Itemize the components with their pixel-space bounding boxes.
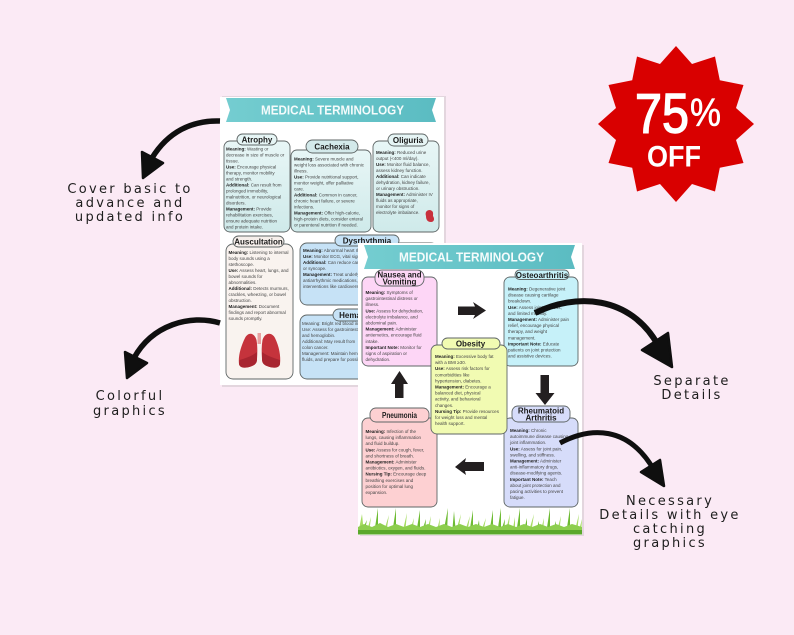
card: Obesity: comorbidities like [435,372,470,377]
card: Oliguria: dehydration, kidney failure, [376,180,430,185]
caption: colorful graphics: Colorful [96,389,164,404]
caption: necessary details: Details with eye [599,508,741,523]
icon: lungs [239,333,280,368]
card: Dysrhythmia: antiarrhythmic medications, [303,278,358,283]
card: Osteoarthritis: management. [508,335,536,340]
card: Cachexia: care. [294,187,304,192]
discount badge: 75 [635,82,689,144]
card: Auscultation [226,236,293,379]
card: Obesity: for weight loss and mental [435,415,487,420]
caption: colorful graphics [93,389,167,419]
card: Osteoarthritis: Important Note: Educate [508,341,559,346]
card: Obesity: Use: Assess risk factors for [435,366,490,371]
card: Cachexia: Use: Provide nutritional support, [294,175,359,180]
card: Oliguria: fluids as appropriate, [376,198,418,203]
card: Atrophy: Management: Provide [226,206,272,211]
card: Oliguria: Additional: Can indicate [376,174,426,179]
card: Atrophy: Meaning: Wasting or [226,146,268,151]
back worksheet page [220,96,446,387]
card: Oliguria: output (<400 ml/day). [376,156,419,161]
curved arrow: top left [142,121,220,178]
card: Atrophy [224,134,290,232]
card: Hematochezia: Hematochezia [339,311,393,320]
caption: cover basic: advance and [75,196,185,211]
card: Pneumonia: expansion. [366,490,387,495]
card: Oliguria: Management: Administer IV [376,192,433,197]
caption: separate details: Separate [653,374,731,389]
card: Dysrhythmia: Meaning: Abnormal heart rhythm. [303,248,371,253]
card: Hematochezia: colon cancer. [302,345,329,350]
card: Obesity: Management: Encourage a [435,384,491,390]
card: Hematochezia: fluids, and prepare for possible surgery. [302,357,381,362]
card: Rheumatoid Arthritis: anti-inflammatory drugs, [510,465,558,470]
card: Auscultation: crackles, wheezing, or bowel [228,292,286,297]
card: Auscultation: obstruction. [228,298,252,303]
card: Auscultation: bowel sounds for [228,274,263,279]
caption: separate details: Details [661,388,723,403]
card: Cachexia: Cachexia [314,142,350,152]
card: Nausea and Vomiting: Meaning: Symptoms of [366,290,413,295]
card: Rheumatoid Arthritis: Arthritis [525,414,557,422]
card: Osteoarthritis: breakdown. [508,299,531,304]
card: Cachexia: Additional: Common in cancer, [294,193,358,198]
front worksheet page [358,243,584,536]
card: Pneumonia: breathing exercises and [366,478,414,483]
caption: separate details [653,374,731,403]
card: Auscultation: findings and report abnormal [228,310,286,315]
card: Obesity: balanced diet, physical [435,391,481,396]
card: Rheumatoid Arthritis: disease-modifying agents. [510,471,562,476]
card: Nausea and Vomiting: Nausea and [378,270,422,280]
card: Atrophy: disorders. [226,200,246,205]
discount badge [598,46,754,202]
card: Hematochezia: and hemoglobin. [302,333,335,338]
card: Atrophy: decrease in size of muscle or [226,152,285,157]
front page banner: MEDICAL TERMINOLOGY [399,250,544,264]
card: Pneumonia: position for optimal lung [366,484,414,489]
icon: kidney [426,210,434,222]
card: Obesity: Nursing Tip: Provide resources [435,409,499,414]
card: Rheumatoid Arthritis: fatigue. [510,495,525,500]
card: Obesity: Obesity [456,340,486,348]
card: Atrophy: ensure adequate nutrition [226,218,278,223]
curved arrow: necessary details [560,433,664,486]
card: Nausea and Vomiting: illness. [366,302,379,307]
card: Hematochezia: Meaning: Bright red blood in stool. [302,321,370,326]
card: Nausea and Vomiting: antiemetics, encourage fluid [366,333,422,338]
curved arrow: bottom left [125,320,220,378]
card: Dysrhythmia: or syncope. [303,266,326,271]
card: Auscultation: stethoscope. [228,262,254,267]
card: Auscultation: Management: Document [228,304,279,309]
card: Oliguria: electrolyte imbalance. [376,210,420,215]
discount badge: % [690,92,721,135]
card: Pneumonia: and fluid buildup. [366,441,400,446]
card: Nausea and Vomiting: Management: Administer [366,327,417,332]
card: Auscultation: Auscultation [234,238,283,246]
card: Nausea and Vomiting: abdominal pain. [366,320,397,326]
card: Atrophy: prolonged immobility, [226,188,268,193]
card: Atrophy: Atrophy [242,136,273,144]
card: Auscultation: Meaning: Listening to internal [228,250,289,255]
card: Hematochezia [300,309,438,379]
card: Rheumatoid Arthritis [504,406,578,507]
card: Oliguria [373,134,439,232]
card: Cachexia: Meaning: Severe muscle and [294,157,354,162]
card: Nausea and Vomiting: gastrointestinal distress or [366,296,418,301]
card: Osteoarthritis: and limited mobility. [508,311,547,316]
card: Cachexia: or parenteral nutrition if needed. [294,223,358,228]
card: Obesity: health support. [435,421,465,426]
card: Pneumonia: lungs, causing inflammation [366,435,422,440]
card: Obesity [431,338,507,434]
card: Rheumatoid Arthritis: Important Note: Teach [510,477,557,482]
card: Dysrhythmia: interventions like cardioversion. [303,284,366,289]
caption: necessary details: catching [633,522,707,537]
card: Nausea and Vomiting: Vomiting [382,278,417,286]
card: Pneumonia: Pneumonia [382,411,417,420]
card: Osteoarthritis: disease causing cartilage [508,293,559,298]
card: Auscultation: abnormalities. [228,280,257,285]
card: Dysrhythmia: Additional: Can reduce cardiac output [303,260,381,265]
card: Nausea and Vomiting: electrolyte imbalance, and [366,314,418,319]
card: Osteoarthritis: therapy, and weight [508,329,548,334]
card: Atrophy: malnutrition, or neurological [226,194,281,199]
card: Oliguria: Meaning: Reduced urine [376,150,426,155]
card: Osteoarthritis: relief, encourage physical [508,323,559,328]
back page banner [226,98,436,122]
caption: colorful graphics: graphics [93,404,167,419]
card: Osteoarthritis: Meaning: Degenerative joint [508,286,565,292]
curved arrow: separate details [535,301,672,367]
card: Oliguria: monitor for signs of [376,204,415,209]
grass strip [358,508,582,534]
card: Pneumonia: antibiotics, oxygen, and fluids. [366,466,426,471]
caption: cover basic [67,182,193,225]
card: Rheumatoid Arthritis: Use: Assess for joint pain, [510,446,562,451]
card: Rheumatoid Arthritis: pacing activities to prevent [510,489,564,494]
arrow: down [536,375,554,405]
card: Auscultation: body sounds using a [228,256,270,261]
card: Nausea and Vomiting: signs of aspiration or [366,351,408,356]
card: Oliguria: Oliguria [393,136,424,145]
card: Dysrhythmia: Management: Treat underlying cause, [303,272,380,277]
card: Osteoarthritis [504,270,578,366]
card: Cachexia: Management: Offer high-calorie, [294,211,360,216]
card: Obesity: activity, and behavioral [435,397,480,402]
card: Hematochezia: Management: Maintain hemodynamics, [302,351,381,356]
back page banner: MEDICAL TERMINOLOGY [261,102,404,118]
card: Cachexia: chronic heart failure, or severe [294,199,355,204]
discount badge: OFF [647,140,701,174]
card: Osteoarthritis: and assistive devices. [508,354,552,359]
card: Cachexia: high-protein diets, consider enteral [294,217,363,222]
front page banner [364,245,575,269]
card: Nausea and Vomiting: Important Note: Monitor for [366,345,422,350]
card: Osteoarthritis: Use: Assess joint stiffness, [508,305,562,310]
card: Pneumonia [362,408,437,507]
card: Rheumatoid Arthritis: joint inflammation. [509,440,546,445]
card: Pneumonia: Management: Administer [366,460,417,464]
card: Cachexia: weight loss associated with chronic [294,163,365,168]
card: Nausea and Vomiting: intake. [366,339,379,344]
card: Hematochezia: Additional: May result from [302,339,356,344]
card: Dysrhythmia: Use: Monitor ECG, vital signs. [303,254,364,259]
card: Pneumonia: Nursing Tip: Encourage deep [366,472,426,477]
card: Cachexia [291,140,371,232]
card: Nausea and Vomiting: Use: Assess for dehydration, [366,308,423,313]
card: Dysrhythmia [300,235,438,305]
card: Pneumonia: Meaning: Infection of the [366,429,416,434]
card: Osteoarthritis: patients on joint protection [508,348,561,352]
card: Rheumatoid Arthritis: Meaning: Chronic [510,428,547,433]
card: Osteoarthritis: Osteoarthritis [516,271,569,280]
card: Atrophy: Additional: Can result from [226,182,282,187]
card: Obesity: with a BMI ≥30. [435,360,466,365]
card: Atrophy: Use: Encourage physical [226,164,276,169]
card: Auscultation: Additional: Detects murmurs, [228,286,289,291]
card: Osteoarthritis: Management: Administer pain [508,317,569,322]
card: Atrophy: therapy, monitor mobility [226,170,275,175]
card: Rheumatoid Arthritis: swelling, and stiffness. [510,452,555,457]
arrow: up [391,371,408,398]
card: Rheumatoid Arthritis: Rheumatoid [518,406,564,416]
card: Rheumatoid Arthritis: about joint protection and [510,483,561,488]
card: Oliguria: Use: Monitor fluid balance, [376,162,430,167]
card: Atrophy: and strength. [226,176,252,181]
card: Atrophy: and protein intake. [226,224,263,229]
arrow: right [458,302,486,319]
card: Oliguria: assess kidney function. [376,168,423,173]
card: Cachexia: infections. [294,205,314,210]
card: Obesity: Meaning: Excessive body fat [435,354,494,359]
card: Auscultation: sounds promptly. [228,316,262,321]
caption: cover basic: Cover basic to [67,182,193,197]
card: Cachexia: monitor weight, offer palliative [294,181,354,186]
card: Obesity: hypertension, diabetes. [435,378,482,383]
card: Pneumonia: Use: Assess for cough, fever, [366,447,424,452]
card: Atrophy: rehabilitation exercises, [226,212,273,217]
card: Dysrhythmia: Dysrhythmia [343,236,392,246]
caption: necessary details [599,494,741,551]
card: Cachexia: illness. [294,169,308,174]
card: Oliguria: or urinary obstruction. [376,186,420,191]
card: Auscultation: Use: Assess heart, lungs, and [228,268,289,273]
card: Atrophy: tissue. [226,158,239,163]
card: Nausea and Vomiting: dehydration. [366,357,390,362]
arrow: left [455,458,484,475]
card: Hematochezia: Use: Assess for gastrointestinal bleeding [302,327,384,332]
card: Rheumatoid Arthritis: autoimmune disease causing [510,434,569,439]
card: Nausea and Vomiting [362,270,437,366]
card: Pneumonia: and shortness of breath. [366,453,414,458]
card: Obesity: changes. [435,403,453,408]
card: Rheumatoid Arthritis: Management: Administer [510,458,561,464]
caption: necessary details: graphics [633,536,707,551]
caption: necessary details: Necessary [626,494,714,509]
caption: cover basic: updated info [75,210,185,225]
